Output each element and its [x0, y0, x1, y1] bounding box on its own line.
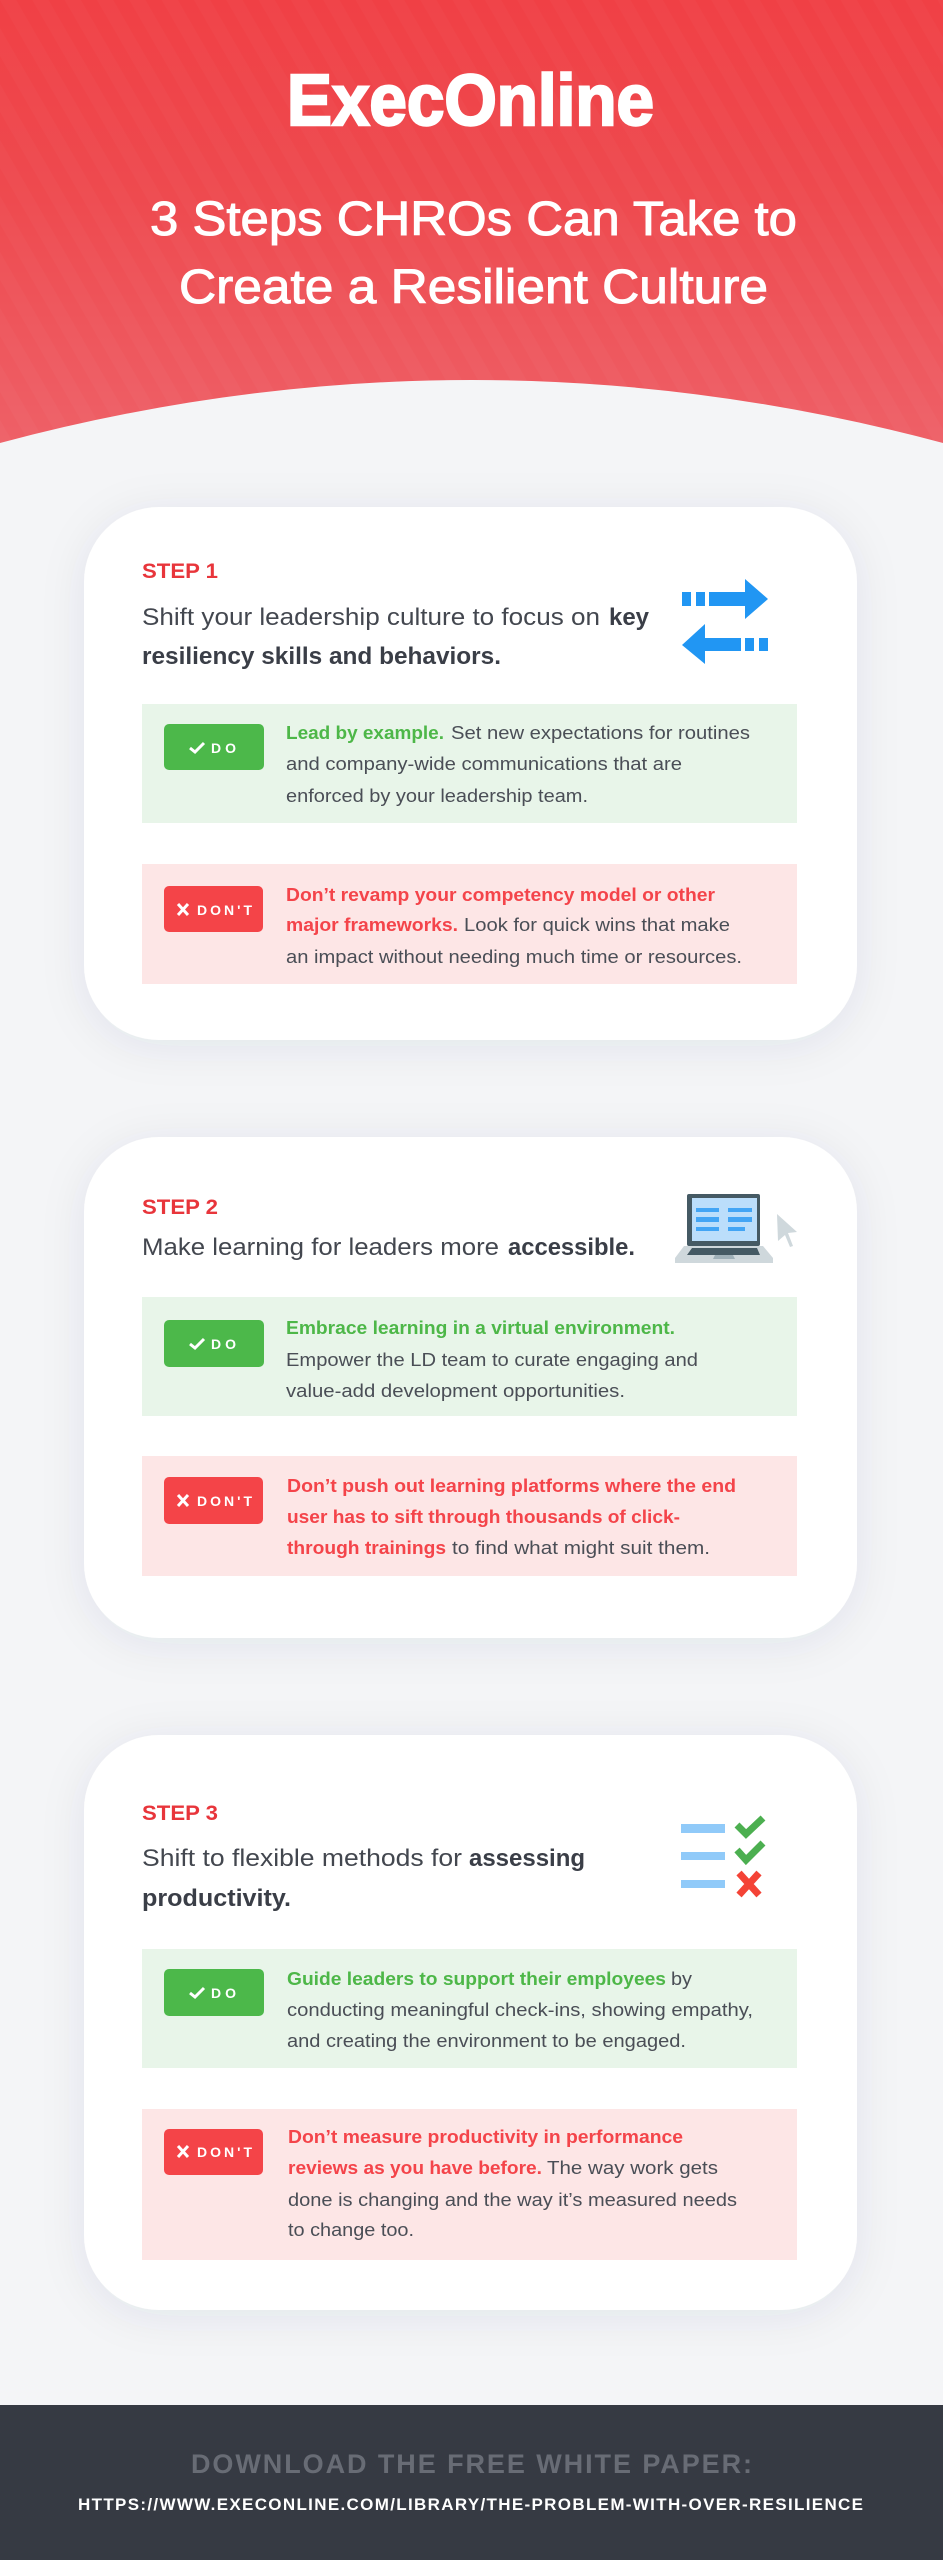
logo: ExecOnline: ExecOnline [287, 61, 654, 141]
don't badge [164, 886, 263, 932]
step 2 heading: accessible. [508, 1234, 635, 1261]
do badge: DO [211, 1336, 236, 1352]
do badge [164, 724, 264, 770]
step 1 heading: Shift your leadership culture to focus on [142, 604, 600, 631]
don't text [288, 2127, 737, 2240]
don't text: done is changing and the way it’s measured needs [288, 2190, 737, 2210]
do panel [142, 1297, 797, 1416]
don't badge: DON'T [197, 1493, 252, 1509]
do text: Set new expectations for routines [451, 723, 750, 743]
title: 3 Steps CHROs Can Take to [150, 193, 797, 246]
do text: Lead by example. [286, 723, 444, 743]
don't text: to find what might suit them. [452, 1538, 710, 1558]
step 1 heading: resiliency skills and behaviors. [142, 643, 501, 670]
don't text: major frameworks. [286, 915, 458, 935]
don't text: reviews as you have before. [288, 2158, 542, 2178]
do badge: DO [211, 740, 236, 756]
panel: step 3 [84, 1735, 857, 2310]
icon: laptop and cursor [675, 1194, 797, 1263]
do text: Empower the LD team to curate engaging and [286, 1350, 698, 1370]
do text: and creating the environment to be engaged. [287, 2031, 686, 2051]
do text: and company-wide communications that are [286, 754, 682, 774]
don't text [286, 885, 742, 967]
footer [0, 2405, 943, 2560]
do text [286, 723, 750, 806]
don't text: Don’t measure productivity in performance [288, 2127, 683, 2147]
title: Create a Resilient Culture [179, 261, 768, 314]
don't panel [142, 2109, 797, 2260]
step 1 label: STEP 1 [142, 560, 218, 583]
footer call to action: DOWNLOAD THE FREE WHITE PAPER: [191, 2449, 752, 2479]
icon: checklist [681, 1818, 763, 1895]
don't text [287, 1476, 736, 1558]
step 2 heading [142, 1234, 635, 1261]
panel: step 2 [84, 1137, 857, 1638]
don't text: through trainings [287, 1538, 446, 1558]
icon: opposing arrows [682, 579, 768, 664]
step 3 heading: assessing [469, 1845, 585, 1872]
don't text: The way work gets [547, 2158, 718, 2178]
don't panel [142, 864, 797, 984]
don't badge: DON'T [197, 2144, 252, 2160]
don't badge: DON'T [197, 902, 252, 918]
don't badge [164, 2129, 263, 2175]
don't text: Don’t push out learning platforms where the end [287, 1476, 736, 1496]
do text: value-add development opportunities. [286, 1381, 625, 1401]
header banner [0, 0, 943, 443]
do text: conducting meaningful check-ins, showing empathy, [287, 2000, 753, 2020]
step 1 heading [142, 604, 650, 670]
do text: Embrace learning in a virtual environment. [286, 1318, 675, 1338]
do text: enforced by your leadership team. [286, 786, 588, 806]
do panel [142, 1949, 797, 2068]
do badge [164, 1969, 264, 2016]
title [150, 193, 797, 314]
step 3 label: STEP 3 [142, 1802, 218, 1825]
do text [287, 1969, 753, 2051]
don't panel [142, 1456, 797, 1576]
step 2 heading: Make learning for leaders more [142, 1234, 499, 1261]
footer url: HTTPS://WWW.EXECONLINE.COM/LIBRARY/THE-PROBLEM-WITH-OVER-RESILIENCE [78, 2495, 863, 2514]
do badge [164, 1320, 264, 1367]
do panel [142, 704, 797, 823]
step 3 heading: productivity. [142, 1885, 291, 1912]
do text [286, 1318, 698, 1401]
don't text: Don’t revamp your competency model or other [286, 885, 715, 905]
panel: step 1 [84, 507, 857, 1040]
don't text: user has to sift through thousands of click- [287, 1507, 680, 1527]
step 3 heading: Shift to flexible methods for [142, 1845, 462, 1872]
step 3 heading [142, 1845, 585, 1912]
don't badge [164, 1477, 263, 1524]
don't text: to change too. [288, 2220, 414, 2240]
step 1 heading: key [609, 604, 650, 631]
don't text: Look for quick wins that make [464, 915, 730, 935]
don't text: an impact without needing much time or resources. [286, 947, 742, 967]
do badge: DO [211, 1985, 236, 2001]
do text: Guide leaders to support their employees [287, 1969, 666, 1989]
do text: by [671, 1969, 692, 1989]
step 2 label: STEP 2 [142, 1196, 218, 1219]
